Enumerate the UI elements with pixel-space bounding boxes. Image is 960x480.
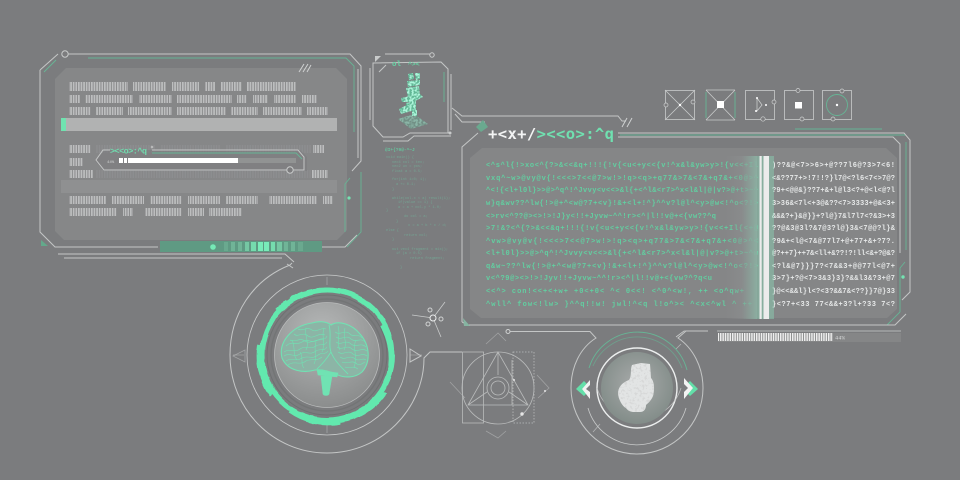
green decoded text: <>rv<^??@><>!>!J}y<!!+Jyvw~^^!r><^|l!!v@+<{vw??^q <box>486 212 716 221</box>
code lines <box>386 155 450 270</box>
white decoded text: }@<<&&l}l<?<3?&&7&<??}}7@}33 <box>772 288 895 296</box>
code lines: if (a > 0.5) <box>396 251 422 256</box>
icon: circle target <box>822 89 852 121</box>
status bar <box>160 241 322 252</box>
code lines: } <box>392 187 394 192</box>
decoding panel background <box>470 148 897 318</box>
code lines: } <box>386 208 388 213</box>
icon: microscope <box>398 73 428 129</box>
code heading: @I+{?9@-^~J <box>385 147 415 153</box>
redacted text lower block <box>69 196 333 216</box>
white decoded text: 3>36&<7l<+3@&??<7>3333+@&<3+ <box>772 200 895 208</box>
panel: text decoding <box>452 108 910 326</box>
infographic canvas <box>40 51 910 454</box>
icon: heart <box>618 363 654 412</box>
white decoded text: ?9+<@@&}??7+&+l@l3<?+@<l<@?l <box>772 187 895 195</box>
code lines: } <box>400 265 402 270</box>
microscope frame <box>370 53 452 141</box>
green decoded text: vxq^~w>@vy@v{!<<<>7<<@7>w!>!q><q>+q77&>7&<7&+q7&+<0@>^ <box>486 174 758 183</box>
gauge inner disc <box>267 295 387 415</box>
progress pill: ><<o>:^q <box>110 146 147 156</box>
white decoded text: ??@&3@3l?&7@3?l@}3&<7@@?l}& <box>772 225 896 233</box>
left chevrons <box>576 380 590 399</box>
gauge rings <box>230 263 462 453</box>
code lines: else { <box>386 228 399 233</box>
icon: brain <box>281 322 368 396</box>
white decoded text: @?++7}++7&<ll+&??!?!ll<&+?@&? <box>772 250 895 258</box>
panel: microscope <box>370 53 452 141</box>
code lines: } <box>396 219 398 224</box>
code lines: if(value == 1) { <box>398 200 433 205</box>
progress pill: 44% <box>107 161 115 165</box>
code lines: for(int i=0; i); <box>392 177 427 182</box>
microscope label tail: ^>< <box>408 60 420 68</box>
code lines: a += 0.1; <box>396 183 415 187</box>
gauge green ring <box>259 289 392 423</box>
white decoded text: 3>7}+?@<7>3&3}3}?&&l3&?3+@7 <box>772 275 895 283</box>
green decoded text: <^s^l{!>xo<^{?>&<<&q+!!!{!v{<u<+y<<{v!^x&l&yw>y>!{v<<+Il <box>486 161 758 170</box>
code lines: return fragment; <box>410 256 445 261</box>
icon: crossed square with centre <box>706 90 735 120</box>
redacted text block <box>69 82 328 115</box>
code lines: a = a + col.y * 1.0; <box>398 205 441 210</box>
green decoded text: <<^> con!<<+<+w+ +0<+0< ^< 0<<! <^0^<w!, ++ <o^qw+ <box>486 287 744 296</box>
progress pill <box>95 146 307 173</box>
green decoded text: v<^?9@><>!>!Jyv!!+Jyvw~^^!r><^|l!!v@+<{vw?^?q<u <box>486 274 712 283</box>
green decoded text: <l+l0l}>>@>^q^!^Jvvy<v<<>&l{+<^l&<r7>^x<l&l|@|v?>@+t>~^w <box>486 249 759 258</box>
icon: crossed square <box>664 90 695 120</box>
green decoded text: >7!&?<^{?>&<<&q+!!!{!v{<u<+y<<{v!^x&l&yw>y>!{v<<+Il{<+@ <box>486 224 759 233</box>
code lines: vec2 uv = pos; <box>392 165 422 169</box>
geometric diagram <box>450 333 549 438</box>
green decoded text: w}q&wv??^lw{!>@+^<w@?7+<v}!&+<l+!^}^^v?l@l^<y>@w<!^o<?!> <box>486 199 758 208</box>
green decoded text: ^<!{<l+l0l}>>@>^q^!^Jvvy<v<<>&l{+<^l&<r7>^x<l&l|@|v?>@+t>~^ <box>486 186 758 195</box>
scan glow band <box>725 156 774 319</box>
icon: square target <box>784 88 814 121</box>
white decoded text: )??&@<7>>6>+@??7l6@?3>7<6! <box>772 162 895 170</box>
left panel frame <box>40 51 361 262</box>
white decoded text: &&&?+}&@}}+?l@}7&l7l7<?&3>+3 <box>772 213 895 221</box>
white decoded text: <?l&@7}}}7?<7&&3+@@77l<@7+ <box>772 263 895 271</box>
code lines: vec4 col = tex; <box>392 160 424 165</box>
code lines: void main() { <box>386 155 414 160</box>
right chevrons <box>684 378 698 399</box>
panel: left text panel <box>40 51 361 262</box>
green decoded text: ^vw>@vy@v{!<<<>7<<@7>w!>!q><q>+q77&>7&<7&+q7&+<0@>^< <box>486 237 758 246</box>
code lines: } <box>392 237 394 242</box>
progress bar: percent: 44% <box>835 334 846 342</box>
brain gauge <box>230 263 462 453</box>
heart gauge <box>506 330 708 454</box>
white decoded text: ?9&+<l@<7&@77l7+@+77+&+?7?. <box>772 238 895 246</box>
progress bar: percent <box>676 331 901 342</box>
code lines: do col = a; <box>404 214 428 219</box>
green decoded text: q&w~??^lw{!>@+^<w@?7+<v}!&+<l+!^}^^v?l@l^<y>@w<!^o<?!> <box>486 262 758 271</box>
code lines: x = a + b * c / d; <box>408 223 447 228</box>
heart disc <box>601 352 673 424</box>
white decoded text: <&??77+>!7!!?}l7@<?l6<7<>7@? <box>772 175 895 183</box>
decoding title: +<x+/><<o>:^q <box>488 125 614 143</box>
code lines: while(col.x < a) result(1); <box>392 196 450 201</box>
green decoded text: ^wll^ fow<!lw> }^^q!!w! jwl!^<q l!o^>< ^<x<^wl ^ ++ <box>486 300 752 309</box>
left panel inner background <box>55 68 347 240</box>
decoding panel frame <box>452 108 910 326</box>
green decoded text <box>486 161 759 309</box>
white decoded text <box>772 162 896 309</box>
code lines: float a = 0.5; <box>392 169 422 174</box>
highlighted band <box>61 118 337 131</box>
faint band <box>61 180 337 193</box>
icon: dotted square <box>746 90 776 121</box>
code lines: out vec4 fragment = mix(); <box>392 247 448 252</box>
redacted text behind progress pill <box>69 145 328 178</box>
microscope label: ol <box>392 61 402 69</box>
heart rings <box>506 330 708 454</box>
icon: rotor glyph <box>412 302 445 337</box>
white decoded text: }<?7+<33 77<&&+3?l+?33 7<? <box>772 301 895 309</box>
code column <box>385 147 450 270</box>
code lines: return col; <box>404 233 428 238</box>
icon row <box>664 88 852 121</box>
